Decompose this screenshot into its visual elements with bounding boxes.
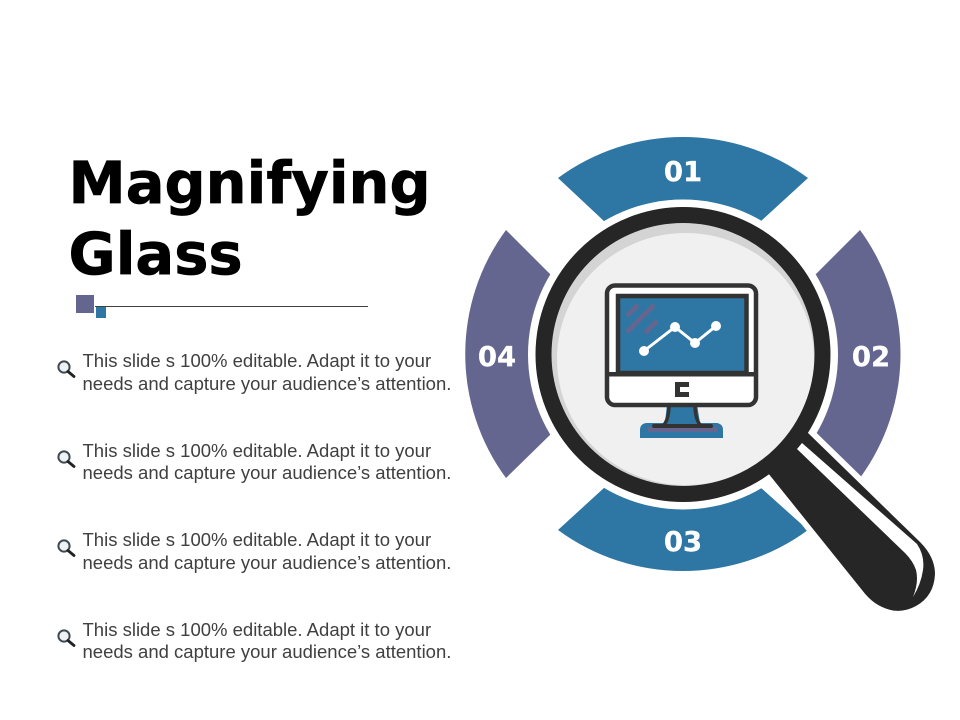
segment 03: 03 [664,526,702,558]
segment 01: 01 [664,156,702,188]
title [68,150,431,288]
icon: small magnifier [57,539,76,557]
icon: small magnifier [57,629,76,647]
text block 2: needs and capture your audience’s attention. [82,462,451,483]
icon: small magnifier [57,360,76,378]
lens halo [528,200,838,510]
segment 04: 04 [478,341,516,373]
segment 03 [558,487,808,571]
title: Glass [68,221,243,288]
title divider with squares [76,295,368,318]
segment 01 [558,137,808,222]
text block 3: This slide s 100% editable. Adapt it to your [82,529,431,550]
text block 4: This slide s 100% editable. Adapt it to your [82,618,431,640]
text block 3: needs and capture your audience’s attention. [82,552,451,572]
text block 3 [57,529,451,573]
icon: computer monitor with line chart [606,286,757,438]
text block 2 [57,440,451,483]
text block 4 [57,618,451,662]
text block 4: needs and capture your audience’s attention. [82,641,451,662]
icon: small magnifier [57,450,76,468]
magnifier handle [768,431,935,611]
magnifier lens [544,215,822,494]
title: Magnifying [68,150,431,217]
segment 04 [465,230,551,478]
text block 2: This slide s 100% editable. Adapt it to your [82,440,431,460]
text block 1: This slide s 100% editable. Adapt it to your [82,350,431,371]
segment 02 [815,230,901,478]
segment 02: 02 [852,341,890,373]
text block 1 [57,350,451,394]
text block 1: needs and capture your audience’s attention. [82,372,451,394]
